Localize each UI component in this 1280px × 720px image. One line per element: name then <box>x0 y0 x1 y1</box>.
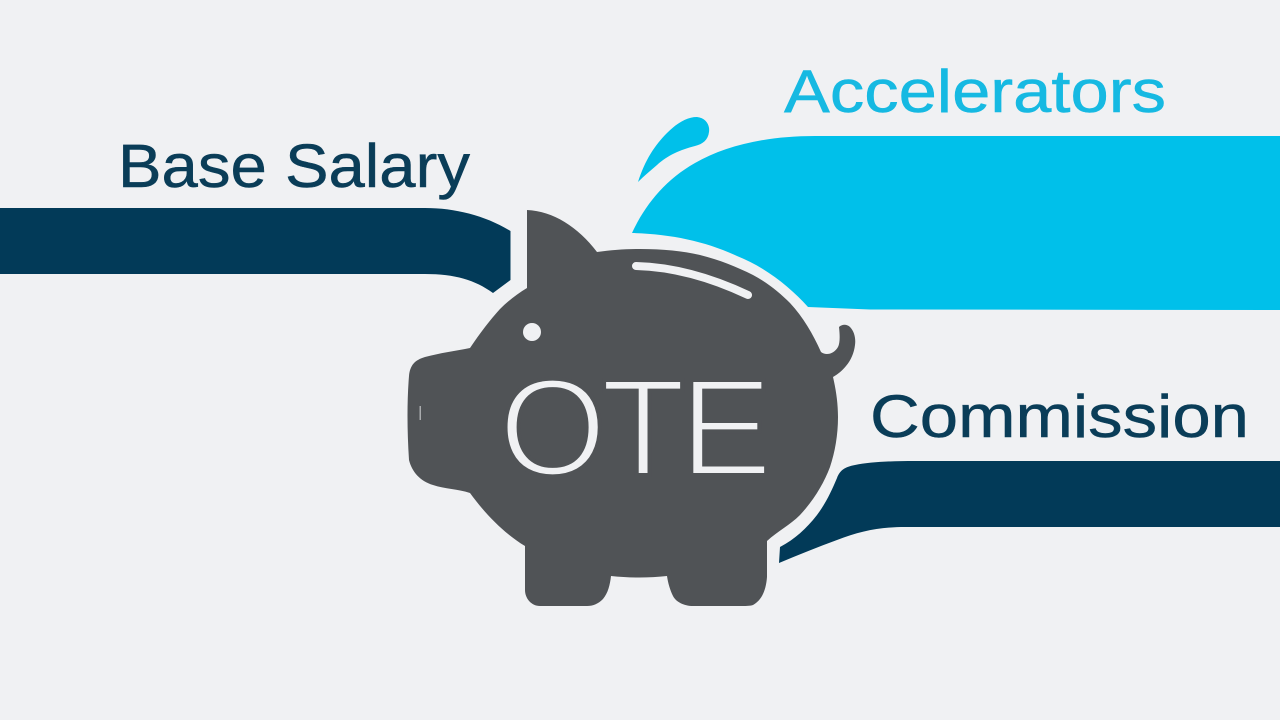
stream: commission <box>779 461 1280 563</box>
pig nostril <box>420 406 421 420</box>
label: OTE: OTE <box>499 351 772 505</box>
icon: piggy bank <box>408 210 855 606</box>
coin slot highlight <box>636 266 748 295</box>
label: commission: Commission <box>870 383 1249 450</box>
label: base salary: Base Salary <box>118 132 471 200</box>
pig body <box>408 210 855 606</box>
icon: water drop <box>638 117 709 182</box>
stream: accelerators <box>632 136 1280 310</box>
stream: base salary <box>0 208 510 293</box>
label: accelerators: Accelerators <box>784 58 1166 125</box>
pig eye <box>523 323 541 341</box>
